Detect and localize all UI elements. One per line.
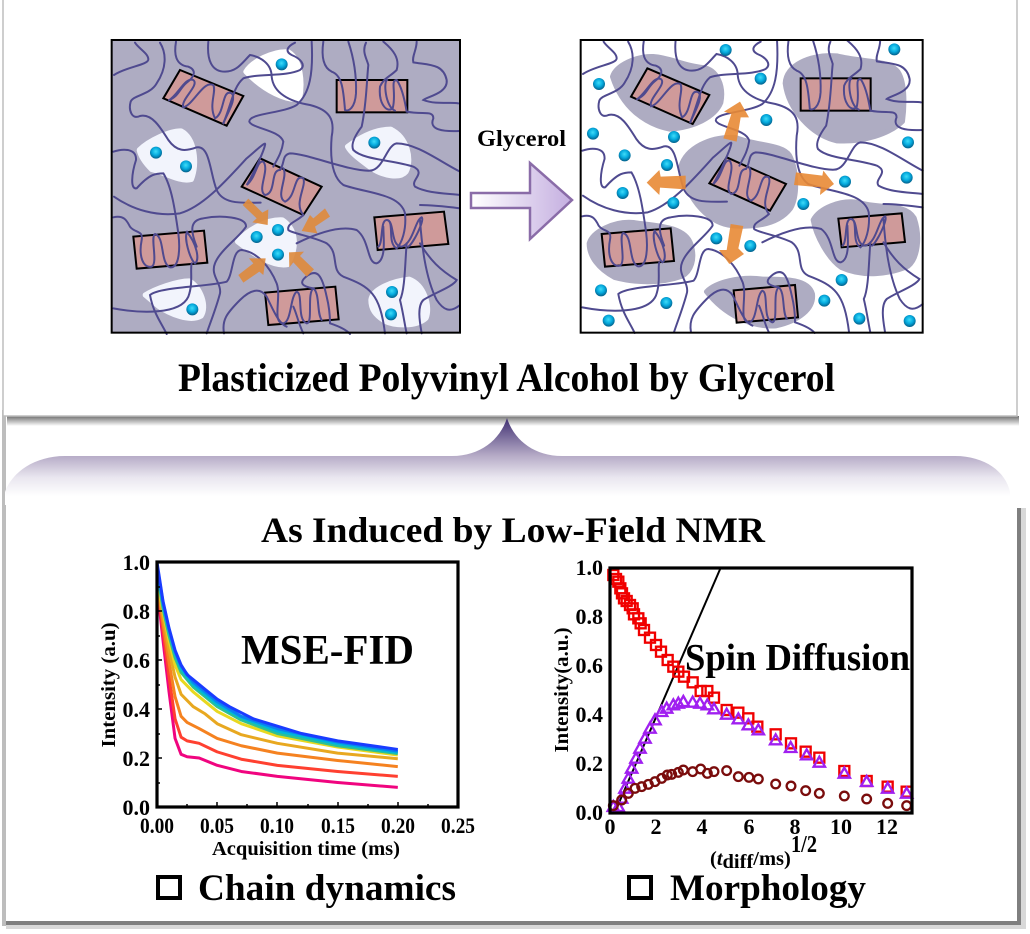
axes box <box>610 568 912 813</box>
panel background <box>3 0 1017 416</box>
x tick labels: 0.05 <box>200 813 234 838</box>
y tick labels: 0.4 <box>576 702 603 727</box>
x tick labels: 0.20 <box>381 813 415 838</box>
brace connector <box>5 418 1010 505</box>
crystals <box>133 70 448 325</box>
x tick labels: 6 <box>744 814 754 839</box>
fit line <box>615 567 721 812</box>
y axis title: Intensity(a.u.) <box>551 628 573 752</box>
legend: chain dynamics <box>158 868 456 909</box>
purple triangles <box>608 696 912 811</box>
diagram: after plasticization <box>581 40 923 333</box>
diagram: before plasticization <box>112 40 460 334</box>
chart: MSE-FID <box>98 550 475 860</box>
x tick labels: 12 <box>876 814 898 839</box>
x tick labels: 0.10 <box>260 813 294 838</box>
dark red circles <box>609 765 911 810</box>
y tick labels: 0.2 <box>576 751 603 776</box>
ticks <box>157 587 428 807</box>
y tick labels: 1.0 <box>576 555 603 580</box>
x tick labels: 2 <box>650 814 662 839</box>
chart label: Spin Diffusion <box>685 637 910 679</box>
glycerol molecules <box>150 58 398 320</box>
frame <box>112 40 460 333</box>
y tick labels: 0.6 <box>576 653 603 678</box>
chart: spin diffusion <box>551 555 912 873</box>
amorphous regions around crystals <box>589 56 917 326</box>
x tick labels: 0 <box>604 814 616 839</box>
y tick labels: 0.2 <box>122 746 150 771</box>
x tick labels: 0.15 <box>321 813 355 838</box>
title: Plasticized Polyvinyl Alcohol by Glycerol <box>178 355 835 400</box>
data markers <box>608 570 912 811</box>
heading: As Induced by Low-Field NMR <box>261 510 766 550</box>
panel shadow <box>7 416 1019 426</box>
y tick labels: 0.0 <box>576 800 603 825</box>
amorphous matrix <box>112 40 460 333</box>
x axis exponent: 1/2 <box>791 832 817 858</box>
y tick labels: 0.4 <box>122 697 150 722</box>
y tick labels: 0.8 <box>122 599 150 624</box>
polymer chains <box>113 42 460 334</box>
x tick labels <box>604 814 898 839</box>
x tick labels: 0.25 <box>441 813 475 838</box>
panel background <box>6 508 1017 921</box>
outer frame <box>2 410 1026 929</box>
x tick labels: 0.00 <box>140 813 174 838</box>
chart label: MSE-FID <box>241 628 414 674</box>
polymer chains <box>582 41 923 333</box>
y axis title: Intensity (a.u) <box>98 623 120 747</box>
x tick labels: 8 <box>790 814 800 839</box>
glycerol molecules <box>587 43 916 327</box>
orange arrows inward <box>238 199 330 283</box>
label: Glycerol: Glycerol <box>477 126 566 151</box>
y tick labels <box>576 555 603 825</box>
label: Chain dynamics <box>198 868 456 909</box>
arrow: glycerol addition <box>471 163 572 239</box>
crystals <box>602 68 905 323</box>
y tick labels <box>122 550 150 820</box>
label: Morphology <box>670 868 867 909</box>
y tick labels: 0.8 <box>576 604 603 629</box>
x tick labels: 4 <box>696 814 708 839</box>
curves <box>157 562 398 787</box>
panel: low-field NMR <box>6 508 1017 921</box>
y tick labels: 0.6 <box>122 648 150 673</box>
orange arrows outward <box>647 102 834 264</box>
x axis title: /ms) <box>752 848 791 870</box>
checkbox <box>629 877 651 898</box>
x tick labels: 10 <box>830 814 852 839</box>
frame <box>581 40 923 333</box>
legend: morphology <box>629 868 867 909</box>
y tick labels: 0.0 <box>122 795 150 820</box>
axes box <box>157 562 458 807</box>
x axis title: Acquisition time (ms) <box>212 838 400 860</box>
red squares <box>608 570 912 797</box>
plasticized matrix <box>581 40 923 333</box>
x tick labels <box>140 813 475 838</box>
checkbox <box>158 877 180 898</box>
panel: plasticized PVA schematic <box>3 0 1019 426</box>
x axis title: (t <box>710 848 723 870</box>
y tick labels: 1.0 <box>122 550 150 575</box>
free volume holes <box>139 52 428 325</box>
x axis title: diff <box>723 851 754 873</box>
